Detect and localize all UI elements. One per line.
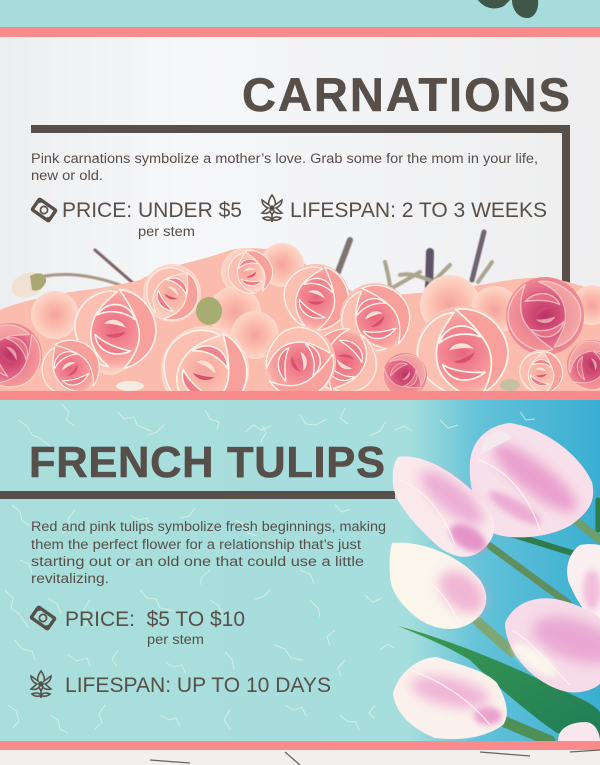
leaf <box>398 626 600 738</box>
pink divider middle <box>0 391 600 400</box>
plaster cracks <box>5 404 535 733</box>
carnations description: new or old. <box>31 168 103 184</box>
carnations description: Pink carnations symbolize a mother’s love. Grab some for the mom in your life, <box>31 151 538 167</box>
carnations lifespan: LIFESPAN: 2 TO 3 WEEKS <box>290 199 547 222</box>
tulips description: Red and pink tulips symbolize fresh beginnings, making <box>31 519 386 535</box>
tulip 5 <box>393 657 507 739</box>
tulips description: them the perfect flower for a relationship that’s just <box>31 537 361 553</box>
blossoms <box>0 243 600 425</box>
petal folds <box>395 460 570 725</box>
bottom wood strip <box>0 750 600 765</box>
tulip 3 <box>390 543 493 629</box>
tulips rule <box>0 491 395 499</box>
carnations panel background <box>0 37 600 391</box>
tulips lifespan: LIFESPAN: UP TO 10 DAYS <box>65 674 331 697</box>
tulip 2 <box>393 456 494 558</box>
carnations title: CARNATIONS <box>242 68 570 121</box>
tulips description <box>31 519 386 587</box>
tulips price <box>31 607 245 647</box>
carnations price <box>32 199 242 239</box>
top teal strip <box>0 0 600 27</box>
stems <box>478 500 600 741</box>
tulips price: PRICE: $5 TO $10 <box>65 608 245 631</box>
carnations description <box>31 151 538 184</box>
carnations price: PRICE: UNDER $5 <box>62 199 242 222</box>
tulip 1 <box>470 423 593 537</box>
french tulips panel background <box>0 400 600 741</box>
tulips description: starting out or an old one that could use a little <box>31 554 364 570</box>
carnation bouquet photo <box>0 232 600 425</box>
tulips price: per stem <box>147 632 204 647</box>
petal mass <box>0 248 600 391</box>
tulip 7 <box>558 722 600 741</box>
carnations frame <box>31 125 570 292</box>
carnations price: per stem <box>138 224 195 239</box>
tulips description: revitalizing. <box>31 571 109 587</box>
tulip bouquet photo <box>390 423 600 741</box>
pink divider bottom <box>0 741 600 750</box>
french tulips title: FRENCH TULIPS <box>29 439 385 487</box>
dried stems and buds <box>45 232 492 300</box>
pink divider top <box>0 27 600 37</box>
tulip 4 <box>505 598 600 692</box>
tulip 6 <box>567 544 600 627</box>
